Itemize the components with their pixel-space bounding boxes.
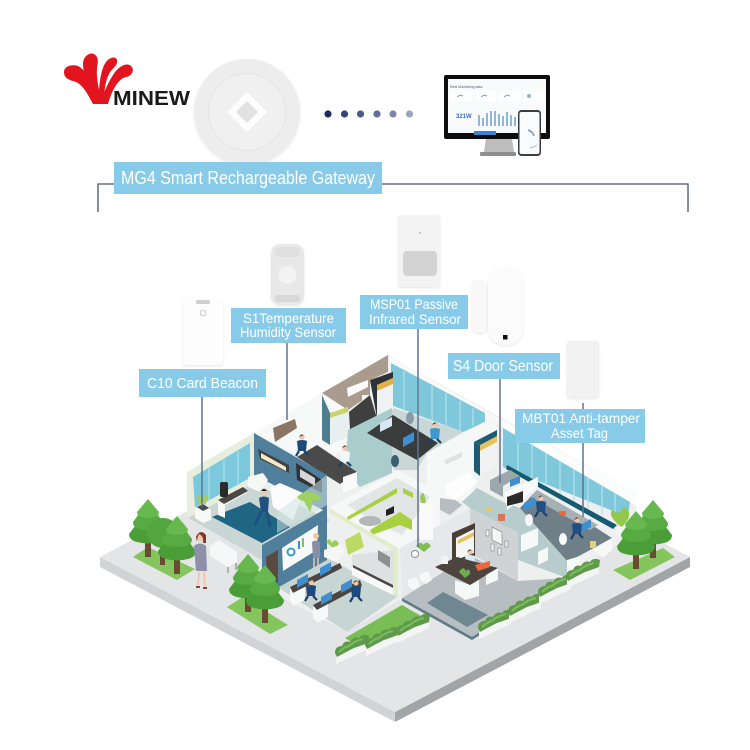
label: S1 Temperature Humidity Sensor: Humidity Sensor [240, 324, 336, 340]
lobby rug [427, 592, 488, 627]
meeting person in white [339, 445, 351, 467]
lobby floor edge [402, 578, 567, 640]
upper office screens [380, 412, 414, 467]
device: S4 door sensor [472, 267, 523, 345]
reception left glass wall [187, 433, 254, 522]
device: MG4 gateway [194, 59, 300, 165]
reception plant in glass [297, 492, 322, 512]
label: S4 Door Sensor: S4 Door Sensor [453, 358, 554, 375]
cubicle person 1 [535, 495, 547, 517]
reception counter [435, 556, 498, 600]
meeting table [297, 445, 357, 484]
trees: middle group [227, 554, 288, 634]
kitchenette counter [349, 395, 377, 430]
right window wall [493, 415, 637, 529]
label: MSP01 Passive Infrared Sensor: MSP01 Passive [370, 296, 458, 312]
meeting table base [343, 472, 357, 493]
lobby floor [402, 555, 567, 638]
reception person [255, 489, 270, 527]
entrance plant on pedestal [195, 494, 211, 523]
central pedestal and plant [412, 493, 433, 558]
bracket line [98, 184, 688, 212]
upper office desk [367, 415, 438, 460]
label: MSP01 Passive Infrared Sensor: Infrared Sensor [369, 311, 461, 327]
meeting person in navy [296, 434, 308, 456]
planters along lobby [478, 559, 600, 639]
cubicle desk surface [520, 490, 612, 562]
front desk [218, 482, 248, 518]
air conditioner [347, 380, 368, 397]
cubicle desk light strip [531, 490, 598, 530]
reception floor [188, 483, 330, 560]
desk worker right [350, 580, 362, 602]
visitor woman [194, 532, 207, 588]
dashboard: monitor and phone [444, 75, 550, 156]
desk worker left [305, 579, 317, 601]
lobby bookshelf [452, 523, 475, 566]
cubicle screens [510, 476, 591, 533]
device: S1 temperature humidity sensor [271, 244, 304, 305]
label: S4 Door Sensor [448, 353, 560, 379]
trees: right group [613, 500, 675, 580]
reception glass partition [277, 475, 327, 533]
dashboard: monitor and phone: Real Monitoring data [450, 85, 482, 89]
reception carpet [212, 502, 290, 543]
upper office floor [367, 408, 463, 470]
label: MSP01 Passive Infrared Sensor [360, 295, 468, 329]
lobby left wall [400, 508, 470, 598]
wall AC [445, 452, 462, 465]
wall shelf [258, 449, 289, 473]
label: S1 Temperature Humidity Sensor: S1Temperature [243, 310, 334, 326]
cubicle glass floor [462, 488, 568, 578]
corner plant stand [324, 539, 345, 562]
label: MG4 Smart Rechargeable Gateway [114, 162, 382, 194]
lobby chairs [408, 571, 432, 590]
logo: Minew: MINEW [113, 88, 190, 110]
connection dots [324, 110, 413, 118]
cubicle white cabinets [521, 514, 612, 577]
framed board [296, 463, 322, 493]
label: MBT01 Anti-tamper Asset Tag [515, 409, 645, 443]
label: S1 Temperature Humidity Sensor [231, 308, 346, 343]
meeting desks [290, 562, 362, 623]
reception sofa [270, 483, 303, 520]
lawn [345, 605, 428, 648]
device: MSP01 passive infrared sensor [398, 215, 440, 287]
lower blue wall [262, 508, 327, 587]
label: MG4 Smart Rechargeable Gateway: MG4 Smart Rechargeable Gateway [121, 168, 375, 188]
white angled panel [505, 477, 538, 510]
receptionist [464, 549, 476, 571]
sofa room floor [440, 498, 462, 515]
office building [187, 355, 637, 640]
upper office person [429, 422, 441, 444]
right potted plant [611, 507, 629, 536]
device: C10 card beacon [183, 300, 223, 365]
printer stand [248, 473, 268, 492]
brown door [266, 550, 278, 583]
back wall brown [322, 355, 388, 410]
dashboard: monitor and phone: 321W [456, 114, 472, 120]
cubicle accents [486, 508, 596, 548]
device: MBT01 anti-tamper asset tag [567, 341, 599, 398]
glass shelf [322, 395, 348, 445]
central teal glass [345, 408, 392, 487]
presenter [312, 533, 320, 568]
label: MBT01 Anti-tamper Asset Tag: MBT01 Anti-tamper [522, 410, 640, 426]
lobby right wall [470, 508, 518, 581]
wall frames [486, 527, 508, 555]
label: C10 Card Beacon [139, 369, 266, 397]
trees: left group [129, 499, 196, 580]
coffee machine [362, 395, 372, 407]
lower meeting floor [277, 557, 397, 632]
planters along lawn [335, 614, 430, 664]
small desk behind glass [490, 470, 520, 497]
sofa [445, 473, 478, 500]
platform [100, 402, 690, 722]
bookshelf [474, 430, 497, 476]
cubicle person 2 [571, 517, 583, 539]
meeting wall white [254, 393, 348, 460]
dark shelf [370, 372, 393, 418]
right upper white wall [427, 415, 497, 500]
reception blue wall [254, 433, 327, 512]
logo: Minew [64, 53, 190, 110]
back wall window band [388, 355, 497, 434]
presentation screen [282, 525, 318, 571]
leader lines [202, 329, 583, 547]
bench [210, 540, 237, 573]
building footprint [187, 355, 637, 638]
cork board [273, 419, 297, 442]
kitchen [328, 470, 440, 597]
label: C10 Card Beacon: C10 Card Beacon [147, 375, 258, 392]
label: MBT01 Anti-tamper Asset Tag: Asset Tag [551, 425, 608, 441]
